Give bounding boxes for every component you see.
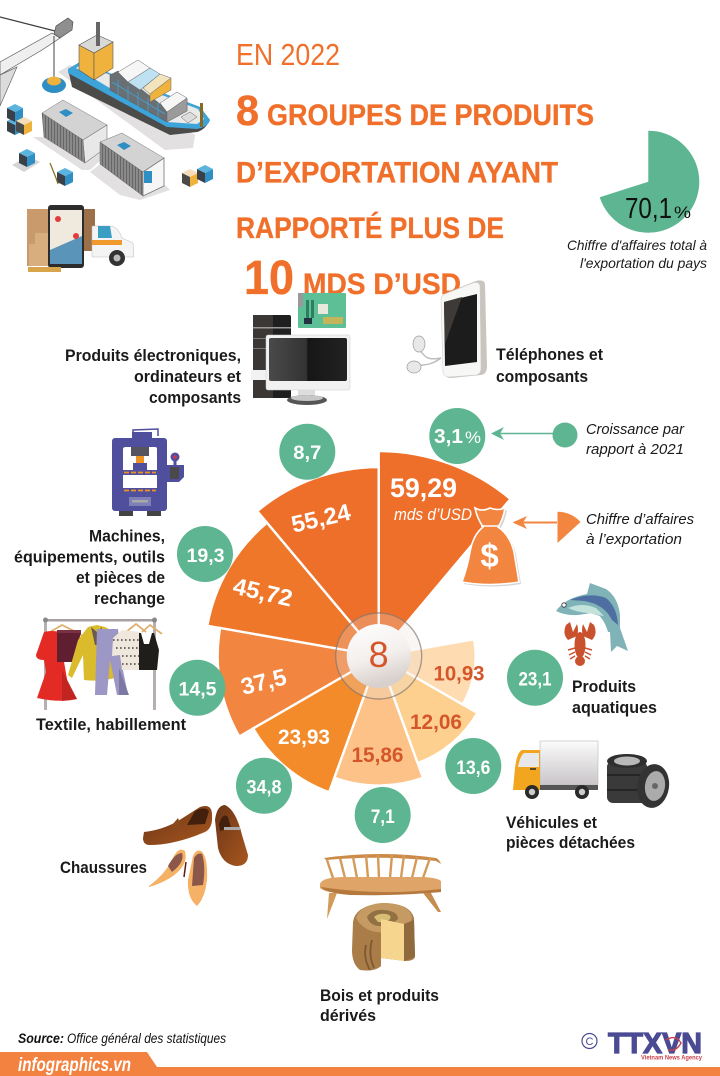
label: aquatic products: aquatiques bbox=[572, 699, 657, 717]
footer bar bbox=[0, 1052, 720, 1076]
bubble 34,8 bbox=[236, 758, 292, 814]
bubble 19,3: 19,3 bbox=[186, 545, 225, 567]
fish bbox=[556, 583, 628, 652]
cargo ship bbox=[58, 22, 210, 150]
bubble 8,7 bbox=[279, 424, 335, 480]
label: electronics bbox=[65, 347, 241, 407]
sector: phones 59,29 bbox=[379, 451, 510, 656]
icon: clothes rack bbox=[36, 618, 162, 710]
value 37,5: 37,5 bbox=[238, 664, 289, 700]
crane bbox=[0, 17, 73, 106]
sector values bbox=[231, 473, 485, 767]
label: machines: et pièces de bbox=[76, 569, 165, 587]
tan high heels bbox=[149, 850, 207, 906]
title line 4: 10 bbox=[244, 252, 294, 305]
value 15,86: 15,86 bbox=[352, 743, 404, 767]
bubble 3,1%: % bbox=[465, 428, 481, 447]
value 55,24: 55,24 bbox=[289, 499, 353, 538]
bubble 14,5 bbox=[169, 660, 225, 716]
label: aquatic products bbox=[572, 678, 657, 717]
value 23,93: 23,93 bbox=[278, 725, 330, 749]
source: Office général des statistiques bbox=[67, 1030, 226, 1046]
pie chart caption: l'exportation du pays bbox=[580, 255, 707, 271]
maroon skirt bbox=[57, 630, 81, 634]
pie chart caption bbox=[567, 237, 707, 271]
lobster bbox=[564, 622, 596, 666]
value 10,93: 10,93 bbox=[434, 662, 485, 686]
title line 4 bbox=[244, 252, 461, 305]
label: machines: rechange bbox=[94, 590, 165, 608]
sector: textile 37,5 bbox=[218, 628, 379, 736]
small boxes bbox=[7, 104, 213, 187]
title line 3: RAPPORTÉ PLUS DE bbox=[236, 211, 504, 245]
sector: aquatic products 10,93 bbox=[379, 639, 476, 704]
bubble 3,1%: 3,1 bbox=[434, 426, 463, 448]
icon: money bag: $ bbox=[480, 537, 499, 574]
label: electronics: ordinateurs et bbox=[134, 368, 241, 386]
legend: growth: rapport à 2021 bbox=[586, 441, 684, 458]
arrow: revenue legend bbox=[512, 516, 557, 529]
red dress bbox=[36, 631, 77, 701]
legend: export revenue bbox=[512, 511, 694, 548]
title line 2: D’EXPORTATION AYANT bbox=[236, 156, 558, 190]
label: wood products bbox=[320, 987, 439, 1025]
title line 4: MDS D’USD bbox=[303, 268, 461, 301]
logo: TTXVN: TTXVN bbox=[608, 1028, 702, 1060]
cargo containers bbox=[33, 100, 170, 200]
bubble 8,7: 8,7 bbox=[293, 442, 321, 464]
label: wood products: dérivés bbox=[320, 1007, 376, 1025]
icon: smartphone with earphones bbox=[407, 280, 487, 378]
icon: shoes bbox=[143, 805, 248, 906]
growth values bbox=[169, 408, 563, 843]
legend: growth bbox=[491, 421, 685, 458]
label: machines bbox=[14, 528, 165, 608]
label: vehicles: Véhicules et bbox=[506, 814, 597, 832]
sector: wood 15,86 bbox=[334, 656, 423, 786]
bubble 13,6 bbox=[445, 738, 501, 794]
title bbox=[236, 37, 594, 305]
label: footwear: Chaussures bbox=[60, 859, 147, 877]
arrow: growth legend bbox=[491, 427, 553, 440]
legend: growth: Croissance par bbox=[586, 421, 685, 438]
illustration: port, cargo ship and containers bbox=[0, 17, 213, 200]
icon: truck bbox=[513, 741, 598, 799]
bubble 19,3 bbox=[177, 526, 233, 582]
label: aquatic products: Produits bbox=[572, 678, 636, 696]
chart hub with number 8 bbox=[336, 613, 422, 699]
source: Source: bbox=[18, 1030, 64, 1046]
bubble 23,1 bbox=[507, 650, 563, 706]
label: electronics: Produits électroniques, bbox=[65, 347, 241, 365]
bubble 7,1: 7,1 bbox=[371, 806, 395, 828]
bubble 23,1: 23,1 bbox=[518, 668, 552, 690]
icon: wooden bench bbox=[320, 854, 441, 919]
label: vehicles: pièces détachées bbox=[506, 834, 635, 852]
pie chart caption: Chiffre d'affaires total à bbox=[567, 237, 707, 253]
title year: EN 2022 bbox=[236, 37, 340, 72]
icon: computer and motherboard bbox=[251, 293, 350, 405]
icon: stack of tyres bbox=[607, 754, 672, 810]
logo: TTXVN: Vietnam News Agency bbox=[641, 1054, 702, 1062]
label: phones: Téléphones et bbox=[496, 346, 603, 364]
label: wood products: Bois et produits bbox=[320, 987, 439, 1005]
label: phones bbox=[496, 346, 603, 386]
chart hub with number 8: 8 bbox=[369, 634, 389, 675]
sector: footwear 23,93 bbox=[253, 656, 379, 792]
legend: export revenue: à l’exportation bbox=[586, 531, 682, 548]
footer bar: infographics.vn bbox=[18, 1055, 131, 1076]
label: electronics: composants bbox=[149, 389, 241, 407]
label: textile: Textile, habillement bbox=[36, 716, 186, 734]
black tank top bbox=[139, 633, 159, 670]
pie chart: 70.1% share of total exports bbox=[600, 131, 699, 233]
yellow jacket bbox=[68, 625, 116, 681]
label: vehicles bbox=[506, 814, 635, 852]
sector: vehicles 12,06 bbox=[379, 656, 477, 763]
value 59,29: 59,29 bbox=[390, 473, 457, 503]
logo: TTXVN: C bbox=[586, 1036, 594, 1048]
bubble 14,5: 14,5 bbox=[178, 678, 217, 700]
value 12,06: 12,06 bbox=[410, 710, 462, 734]
label: machines: équipements, outils bbox=[14, 548, 165, 566]
dotted blouse bbox=[112, 630, 140, 670]
bubble 3,1% bbox=[429, 408, 485, 464]
pie chart: 70.1% share of total exports: 70,1 bbox=[625, 193, 672, 225]
icon: fish and lobster bbox=[556, 583, 628, 666]
unit mds d'USD: mds d’USD bbox=[394, 505, 472, 524]
source bbox=[18, 1030, 226, 1046]
icon: industrial press machine bbox=[112, 429, 184, 516]
icon: wood stump bbox=[352, 903, 415, 970]
legend: export revenue: Chiffre d’affaires bbox=[586, 511, 694, 528]
bubble 34,8: 34,8 bbox=[246, 776, 282, 798]
label: machines: Machines, bbox=[89, 528, 165, 546]
radial bar chart: 8 export groups bbox=[207, 451, 511, 792]
title line 1: GROUPES DE PRODUITS bbox=[267, 99, 594, 132]
label: phones: composants bbox=[496, 368, 588, 386]
icon: money bag bbox=[462, 508, 521, 586]
title line 1 bbox=[236, 87, 594, 135]
value 45,72: 45,72 bbox=[231, 573, 295, 612]
sector: machines 45,72 bbox=[207, 523, 379, 656]
brown loafers bbox=[143, 805, 248, 866]
lavender jeans bbox=[95, 629, 128, 695]
sector: electronics 55,24 bbox=[257, 467, 379, 656]
title line 1: 8 bbox=[236, 87, 259, 135]
pie chart: 70.1% share of total exports: % bbox=[674, 203, 691, 222]
illustration: delivery truck with smartphone map bbox=[27, 205, 134, 272]
bubble 7,1 bbox=[355, 787, 411, 843]
bubble 13,6: 13,6 bbox=[456, 757, 490, 779]
